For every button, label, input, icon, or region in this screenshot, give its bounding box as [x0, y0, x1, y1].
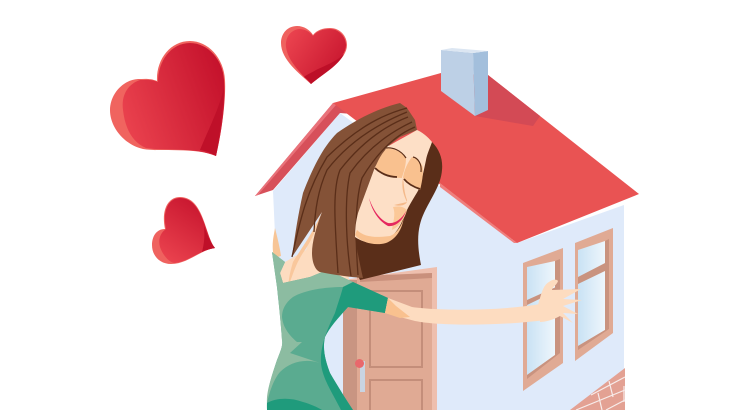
- icon: large heart: [110, 41, 225, 156]
- hair strands: [292, 108, 415, 276]
- left eave of roof: [255, 103, 352, 196]
- icon: small bottom heart: [152, 197, 215, 264]
- hair back, dark: [340, 142, 442, 280]
- dress hem: [267, 399, 322, 410]
- door handle: [355, 359, 365, 392]
- woman: [267, 103, 582, 410]
- arm: [385, 298, 545, 325]
- right window: [575, 228, 613, 361]
- door: [343, 267, 437, 410]
- nose: [394, 178, 407, 206]
- chin shadow: [355, 217, 404, 244]
- icon: small top heart: [281, 26, 347, 84]
- brick base: [570, 368, 625, 410]
- face: [355, 130, 432, 244]
- hair front: [292, 103, 417, 278]
- hand: [538, 280, 582, 323]
- dress body: [267, 252, 388, 410]
- left window: [523, 248, 563, 391]
- eyebrows and closed eyes: [375, 148, 421, 189]
- neck and chest: [280, 212, 350, 286]
- dress light areas: [267, 252, 353, 403]
- house: [255, 48, 639, 410]
- dress: [267, 252, 388, 410]
- back arm: [273, 228, 281, 258]
- eye shadows: [375, 148, 406, 178]
- chimney: [441, 48, 488, 116]
- door panels: [370, 291, 422, 410]
- main roof: [333, 73, 639, 243]
- smile: [369, 198, 406, 226]
- dress dark band and sleeve: [321, 282, 388, 410]
- chimney shadow: [475, 75, 540, 126]
- house wall: [273, 113, 624, 410]
